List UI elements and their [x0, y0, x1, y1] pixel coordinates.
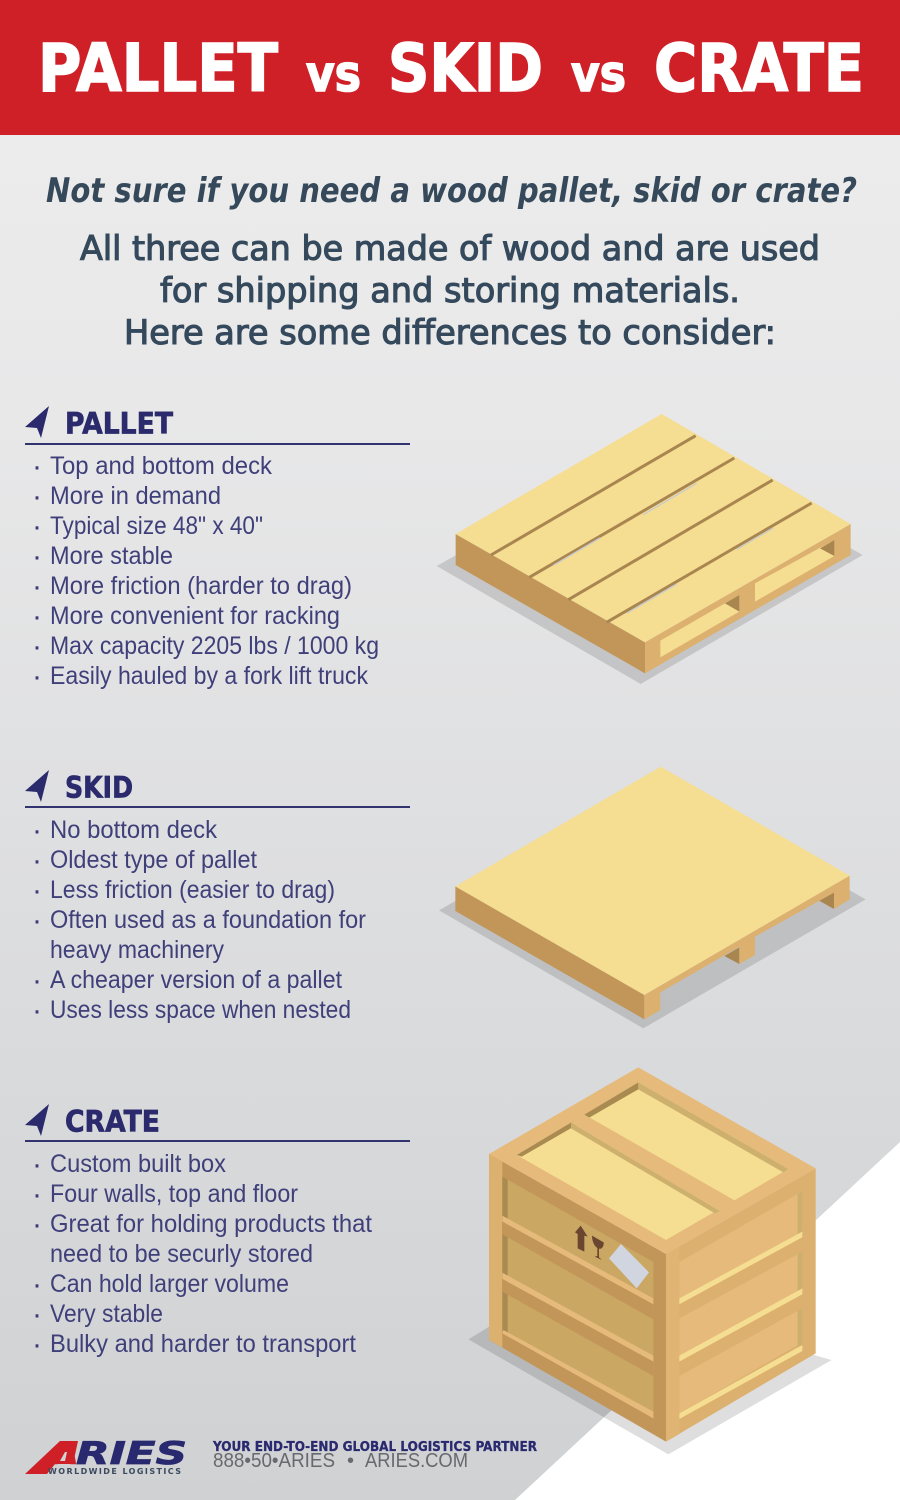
- contact line: 888•50•ARIES: [213, 1450, 335, 1472]
- skid list: A cheaper version of a pallet: [50, 966, 342, 994]
- logo: [25, 1436, 187, 1476]
- header banner: [0, 0, 900, 135]
- pallet list: Top and bottom deck: [50, 452, 272, 480]
- crate list: [32, 1148, 372, 1361]
- panel: skid text: [25, 770, 410, 1027]
- skid list: ·: [32, 814, 42, 847]
- crate list: Great for holding products that: [50, 1210, 372, 1238]
- skid list: No bottom deck: [50, 816, 217, 844]
- top face: [489, 1067, 816, 1254]
- skid list: [32, 814, 366, 1027]
- pallet list: ·: [32, 600, 42, 633]
- pallet list: Typical size 48" x 40": [50, 512, 263, 540]
- pallet list: ·: [32, 480, 42, 513]
- intro text: All three can be made of wood and are used: [80, 229, 820, 268]
- tagline: YOUR END-TO-END GLOBAL LOGISTICS PARTNER: [212, 1440, 537, 1455]
- crate list: Very stable: [50, 1300, 163, 1328]
- title: vs: [306, 45, 361, 103]
- skid list: ·: [32, 994, 42, 1027]
- right face: [666, 1168, 816, 1442]
- title: vs: [571, 45, 626, 103]
- left face: [489, 1154, 666, 1442]
- title: PALLET: [38, 30, 278, 107]
- contact line: ARIES.COM: [365, 1450, 468, 1472]
- skid list: ·: [32, 904, 42, 937]
- crate list: Bulky and harder to transport: [50, 1330, 356, 1358]
- crate list: ·: [32, 1298, 42, 1331]
- pallet list: More stable: [50, 542, 173, 570]
- pallet list: More friction (harder to drag): [50, 572, 352, 600]
- title: CRATE: [654, 30, 864, 107]
- crate list: ·: [32, 1178, 42, 1211]
- panel: crate text: [25, 1104, 410, 1361]
- intro text: [80, 229, 820, 352]
- pallet list: [32, 450, 379, 693]
- pallet list: ·: [32, 660, 42, 693]
- crate list: Custom built box: [50, 1150, 226, 1178]
- crate list: need to be securly stored: [50, 1240, 313, 1268]
- illustration: skid: [439, 767, 866, 1028]
- skid list: Oldest type of pallet: [50, 846, 257, 874]
- contact line: [213, 1450, 468, 1472]
- heading: skid: SKID: [65, 770, 133, 804]
- pallet list: Easily hauled by a fork lift truck: [50, 662, 368, 690]
- pallet list: More convenient for racking: [50, 602, 340, 630]
- pallet list: More in demand: [50, 482, 221, 510]
- pallet list: ·: [32, 510, 42, 543]
- skid list: ·: [32, 964, 42, 997]
- panel: pallet text: [25, 406, 410, 693]
- skid list: heavy machinery: [50, 936, 224, 964]
- label sticker: [609, 1244, 649, 1288]
- icon: this way up arrow: [575, 1226, 588, 1252]
- heading: crate: CRATE: [65, 1104, 160, 1138]
- skid list: ·: [32, 844, 42, 877]
- pallet list: Max capacity 2205 lbs / 1000 kg: [50, 632, 379, 660]
- intro text: Here are some differences to consider:: [124, 313, 776, 352]
- pallet list: ·: [32, 540, 42, 573]
- crate list: ·: [32, 1208, 42, 1241]
- footer: [25, 1436, 537, 1476]
- logo: A: [50, 1436, 79, 1472]
- crate list: Can hold larger volume: [50, 1270, 289, 1298]
- icon: skid arrow: [25, 770, 49, 802]
- skid list: Uses less space when nested: [50, 996, 351, 1024]
- pallet list: ·: [32, 630, 42, 663]
- heading: pallet: PALLET: [65, 406, 173, 440]
- icon: crate arrow: [25, 1104, 49, 1136]
- crate list: Four walls, top and floor: [50, 1180, 298, 1208]
- pallet list: ·: [32, 570, 42, 603]
- skid list: Less friction (easier to drag): [50, 876, 335, 904]
- crate list: ·: [32, 1268, 42, 1301]
- skid list: Often used as a foundation for: [50, 906, 366, 934]
- white corner wedge: [515, 1142, 900, 1500]
- crate list: ·: [32, 1148, 42, 1181]
- intro text: for shipping and storing materials.: [160, 271, 740, 310]
- icon: fragile glass: [592, 1236, 604, 1260]
- title: SKID: [388, 30, 543, 107]
- logo: RIES: [76, 1436, 187, 1472]
- logo: WORLDWIDE LOGISTICS: [48, 1467, 181, 1476]
- title: [38, 30, 864, 107]
- illustration: crate: [468, 1067, 832, 1454]
- crate list: ·: [32, 1328, 42, 1361]
- icon: pallet arrow: [25, 406, 49, 438]
- contact line: •: [347, 1450, 354, 1472]
- illustration: pallet: [437, 414, 863, 684]
- skid list: ·: [32, 874, 42, 907]
- pallet list: ·: [32, 450, 42, 483]
